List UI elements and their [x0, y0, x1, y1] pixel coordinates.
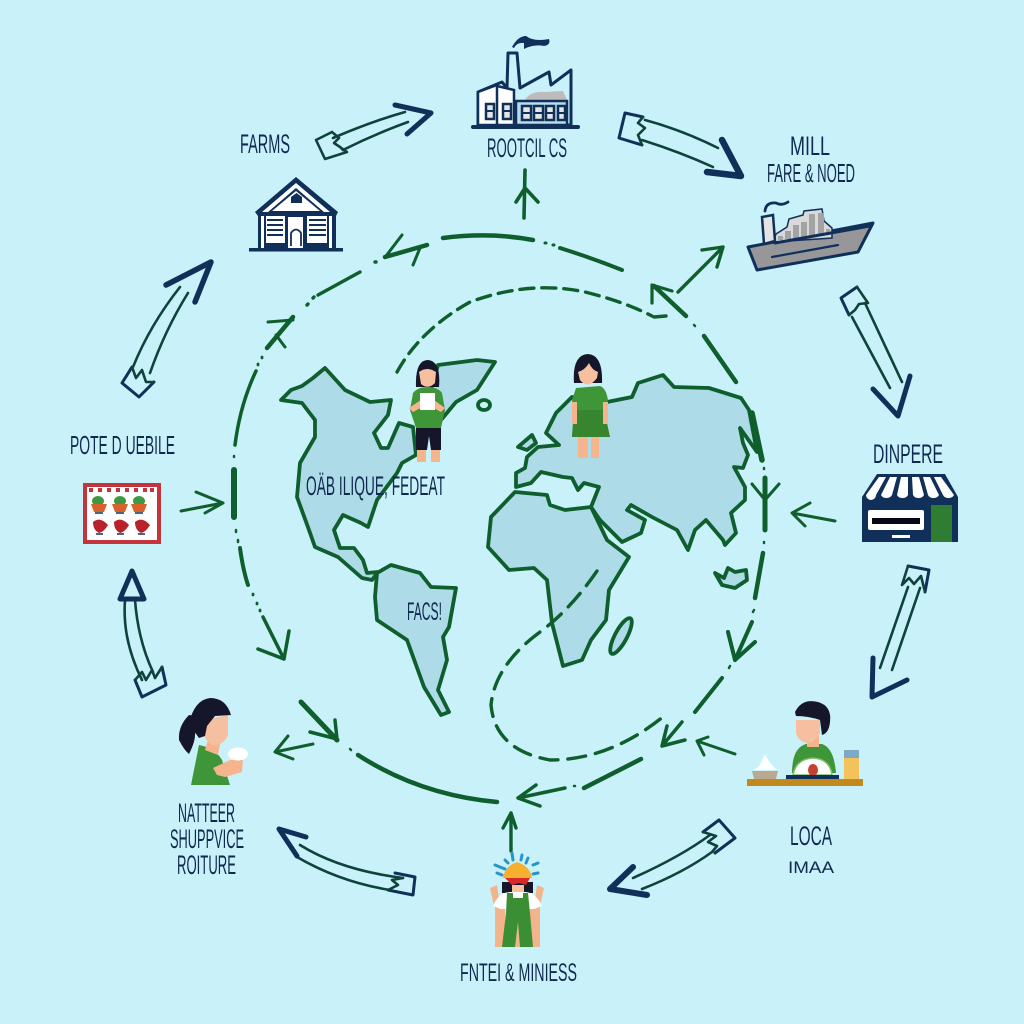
continent: North America	[281, 368, 416, 580]
arrow: from restaurant	[697, 737, 735, 755]
label: store: DINPERE	[873, 439, 943, 469]
island: Iceland	[478, 400, 490, 410]
world map: FACS!	[407, 598, 442, 626]
figure: customer at restaurant	[747, 701, 863, 786]
glass	[844, 758, 859, 779]
icon: farm barn	[249, 177, 343, 252]
table	[747, 779, 863, 786]
figure: person in green dress	[572, 354, 610, 458]
figure: person holding paper	[409, 360, 445, 462]
label: nature supply	[170, 798, 244, 880]
arrow: from store	[792, 503, 835, 526]
icon: factory	[473, 36, 578, 127]
plate	[793, 758, 832, 775]
infographic canvas: ROOTCIL CS	[487, 133, 567, 163]
cycle arrow: factory to ship	[619, 113, 741, 176]
tomatoes bottom row	[93, 520, 150, 534]
label: nature supply: ROITURE	[177, 850, 236, 880]
outer dashed loop	[234, 235, 779, 806]
island: Madagascar	[606, 616, 636, 656]
figure: field worker	[490, 853, 544, 947]
rays	[495, 853, 538, 875]
bowl	[752, 771, 778, 779]
infographic canvas: SHUPPVICE	[170, 824, 244, 854]
cycle arrow: ship to store	[841, 287, 910, 416]
figure: consumer with ice cream	[179, 698, 248, 785]
continent: Greenland	[425, 360, 495, 420]
cycle arrow: farms to factory	[316, 105, 431, 159]
world map	[281, 360, 757, 715]
icon: cargo ship	[748, 202, 873, 270]
label: imaa: IMAA	[788, 858, 835, 877]
arrow: to market circle	[181, 492, 223, 513]
icon: storefront	[862, 474, 958, 542]
island: Southeast Asia	[715, 568, 747, 588]
cycle arrow: market to farms	[122, 262, 211, 397]
arrow: from worker	[503, 813, 516, 851]
continent: South America	[375, 565, 456, 715]
island: Britain	[518, 435, 536, 450]
label: workers: FNTEI & MINIESS	[460, 959, 577, 987]
inner dashed route lower	[491, 571, 664, 760]
vegetables top row	[91, 496, 147, 513]
cycle arrow: consumer to market	[120, 571, 166, 697]
inner arrow to ship	[654, 247, 723, 317]
continent: Eurasia	[516, 375, 757, 550]
label: local: LOCA	[790, 821, 832, 851]
label: nature supply: NATTEER	[178, 798, 235, 828]
icon: market stall	[83, 483, 160, 542]
map label left: OÄB ILIQUE, FEDEAT	[306, 471, 445, 501]
arrow: to consumer	[275, 736, 313, 759]
arrow: to factory	[516, 170, 538, 218]
cycle arrow: store to restaurant	[872, 566, 929, 697]
label: fare and noed: FARE & NOED	[767, 158, 855, 188]
continent: Africa	[488, 492, 629, 666]
cycle arrow: worker to consumer	[279, 829, 415, 895]
label: market: POTE D UEBILE	[70, 430, 175, 460]
inner dashed route upper	[397, 288, 652, 372]
label: farms: FARMS	[240, 129, 290, 159]
cycle arrow: restaurant to worker	[610, 820, 735, 895]
label: mill: MILL	[790, 131, 830, 161]
